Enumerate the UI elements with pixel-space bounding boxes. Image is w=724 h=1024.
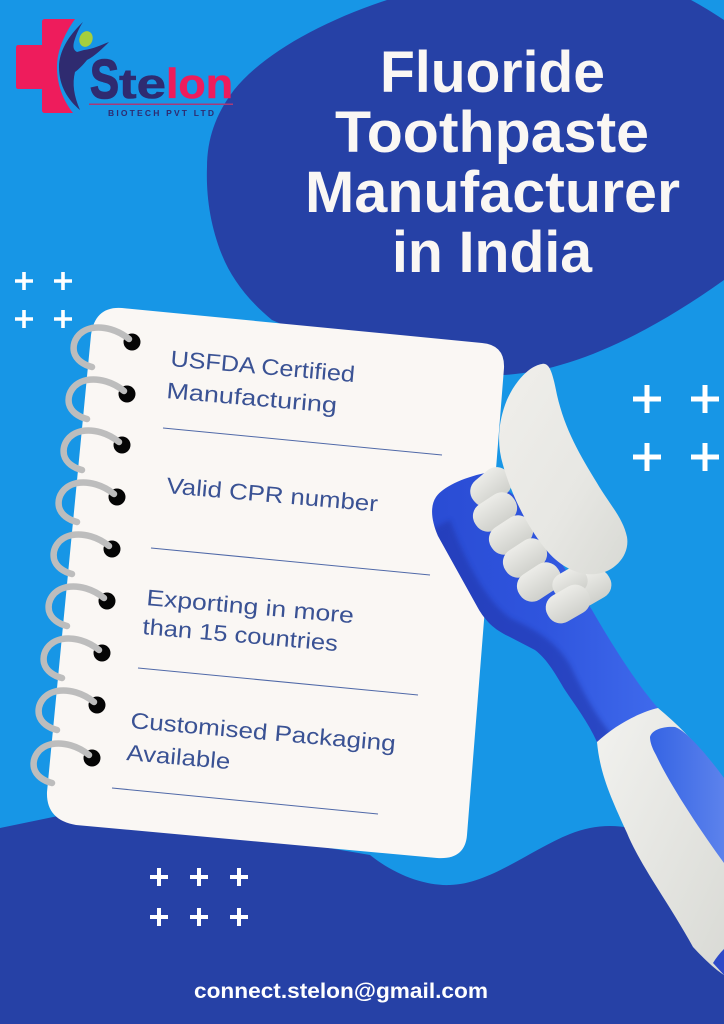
toothbrush — [430, 364, 724, 975]
title: Toothpaste — [335, 100, 649, 165]
plus signs: top left — [15, 272, 72, 328]
logo rule — [89, 104, 233, 105]
title — [305, 40, 680, 285]
title: Fluoride — [380, 40, 605, 105]
item: Valid CPR number: Valid CPR number — [166, 473, 380, 517]
spiral binding — [34, 327, 140, 783]
item: Exporting in more than 15 countries: Exporting in more — [146, 585, 355, 628]
toothpaste dollop — [499, 364, 627, 574]
item: Customised Packaging Available: Customised Packaging — [130, 708, 397, 756]
notepad page — [47, 308, 504, 858]
toothbrush handle — [597, 708, 724, 975]
handle inset — [650, 727, 724, 863]
top dark blue blob — [207, 0, 724, 375]
item: Exporting in more than 15 countries: than 15 countries — [142, 614, 339, 656]
notepad — [34, 308, 504, 858]
item: USFDA Certified Manufacturing: Manufacturing — [166, 378, 338, 418]
item: Customised Packaging Available: Available — [126, 740, 231, 774]
title: Manufacturer — [305, 160, 680, 225]
item: Exporting in more than 15 countries — [142, 585, 355, 656]
bottom dark blue wave — [0, 815, 724, 1024]
item: USFDA Certified Manufacturing: USFDA Certified — [170, 346, 356, 387]
title: in India — [392, 220, 593, 285]
toothbrush shading — [430, 520, 612, 750]
contact email: connect.stelon@gmail.com — [194, 980, 488, 1003]
logo figure head — [77, 29, 95, 49]
logo wordmark: Stelon — [90, 48, 233, 110]
plus signs: bottom — [150, 868, 248, 926]
logo subtitle: BIOTECH PVT LTD — [108, 108, 214, 118]
handle end cap — [713, 949, 724, 975]
item: Customised Packaging Available — [126, 708, 397, 774]
plus signs: right — [633, 385, 719, 471]
logo — [16, 19, 233, 118]
divider lines — [112, 428, 442, 814]
item: USFDA Certified Manufacturing — [166, 346, 356, 418]
toothbrush head and neck — [432, 473, 658, 742]
bristles — [465, 461, 617, 628]
logo cross — [16, 19, 75, 113]
logo figure swoosh — [59, 22, 109, 110]
